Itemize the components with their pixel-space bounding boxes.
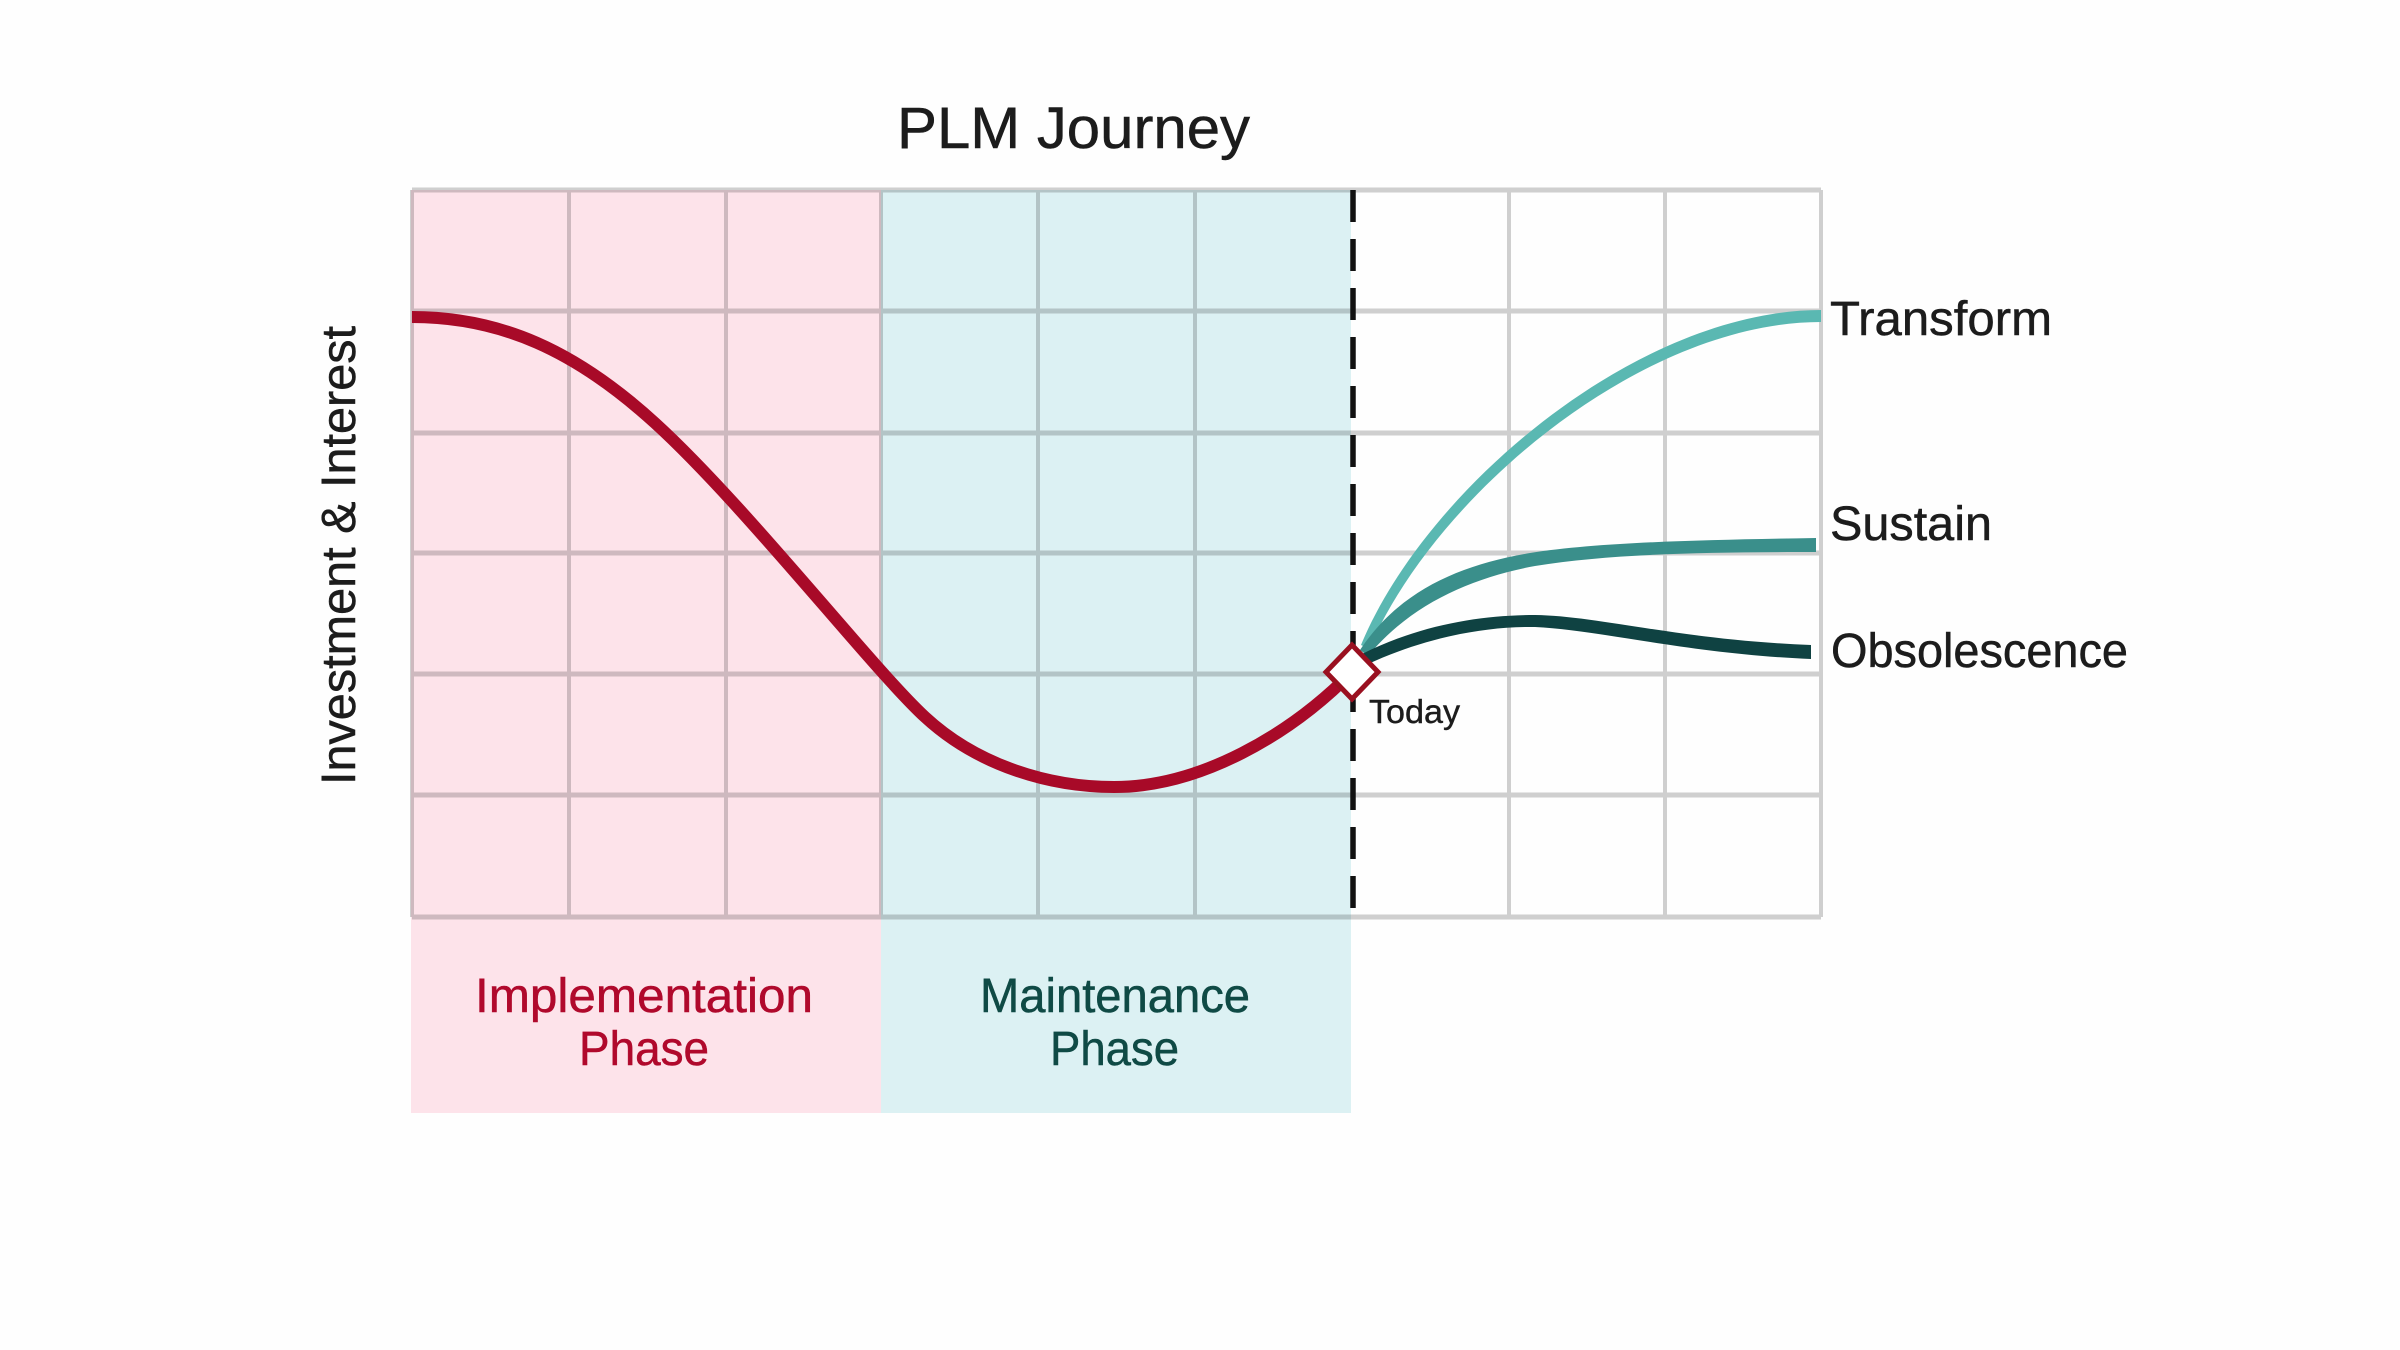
curve: sustain <box>1360 538 1816 656</box>
label: implementation phase: Implementation <box>475 970 813 1023</box>
panel: maintenance phase band <box>881 190 1351 1113</box>
y axis label: Investment & Interest <box>313 326 366 785</box>
label: maintenance phase: Maintenance <box>980 970 1250 1023</box>
curve: obsolescence <box>1362 615 1811 664</box>
label: implementation phase: Phase <box>579 1023 709 1076</box>
label: obsolescence: Obsolescence <box>1831 625 2128 678</box>
today label: Today <box>1369 693 1461 730</box>
label: transform: Transform <box>1830 293 2052 346</box>
label: maintenance phase <box>980 970 1250 1076</box>
curve: transform <box>1361 310 1821 649</box>
today dashed line <box>1350 190 1356 912</box>
curve: implementation and maintenance journey <box>412 317 1352 787</box>
chart grid <box>412 190 1821 917</box>
label: maintenance phase: Phase <box>1050 1023 1179 1076</box>
label: sustain: Sustain <box>1830 498 1992 551</box>
panel: implementation phase band <box>411 190 881 1113</box>
title: PLM Journey <box>897 96 1250 161</box>
label: implementation phase <box>475 970 813 1076</box>
icon: today diamond marker <box>1326 645 1378 699</box>
